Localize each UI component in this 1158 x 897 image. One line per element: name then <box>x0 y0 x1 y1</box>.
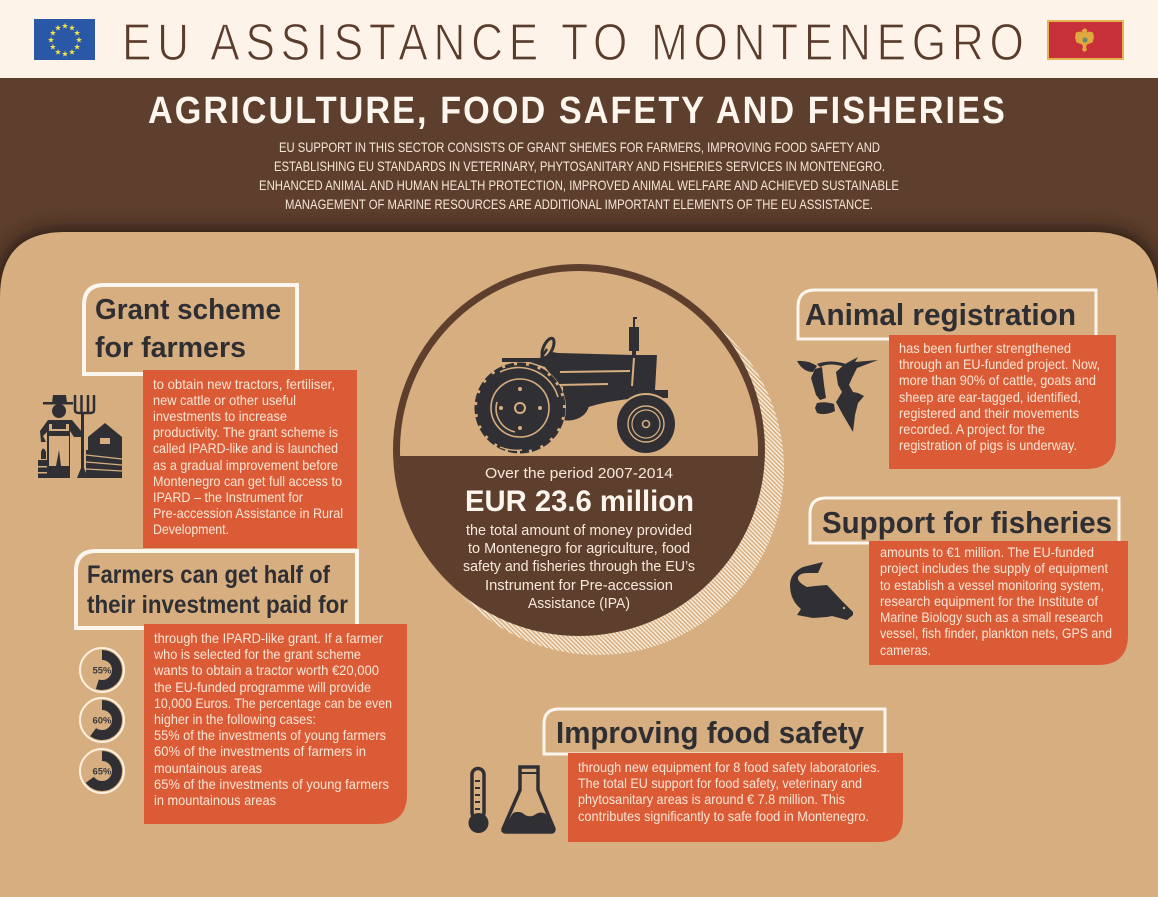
circle body <box>393 264 765 636</box>
centre text: to Montenegro for agriculture, food <box>468 541 690 557</box>
intro text: ENHANCED ANIMAL AND HUMAN HEALTH PROTECTION, IMPROVED ANIMAL WELFARE AND ACHIEVED SUSTAINABLE <box>259 177 899 193</box>
intro text: MANAGEMENT OF MARINE RESOURCES ARE ADDITIONAL IMPORTANT ELEMENTS OF THE EU ASSISTANCE. <box>285 196 873 212</box>
body text: to obtain new tractors, fertiliser, <box>153 376 335 392</box>
icon: farmer with pitchfork and barn <box>38 395 122 478</box>
front wheel <box>615 393 677 455</box>
body text: Montenegro can get full access to <box>153 473 342 489</box>
centre text: safety and fisheries through the EU’s <box>463 559 695 575</box>
chart: 55% donut: 55% <box>92 666 112 676</box>
icon: cow head <box>797 357 878 432</box>
panel: grant scheme for farmers <box>38 285 357 548</box>
body text: 65% of the investments of young farmers <box>154 776 389 792</box>
chart: 65% donut <box>80 749 124 793</box>
heading: Animal registration <box>805 297 1076 332</box>
chart: 65% donut: 65% <box>92 766 112 778</box>
body text: new cattle or other useful <box>153 392 296 408</box>
body text: called IPARD-like and is launched <box>153 440 338 456</box>
panel shadow <box>0 227 1158 897</box>
centre text: Assistance (IPA) <box>528 596 630 612</box>
body text: project includes the supply of equipment <box>880 560 1108 576</box>
icon: Montenegro flag <box>1048 21 1123 59</box>
body text <box>153 630 392 808</box>
hatched circle shadow <box>412 283 784 655</box>
heading box <box>810 498 1119 543</box>
body text: recorded. A project for the <box>899 421 1045 437</box>
heading <box>87 561 348 619</box>
intro text: ESTABLISHING EU STANDARDS IN VETERINARY, PHYTOSANITARY AND FISHERIES SERVICES IN MONTENEGRO. <box>274 158 885 174</box>
header band <box>0 0 1158 78</box>
intro text <box>259 139 899 212</box>
body text: through new equipment for 8 food safety laboratories. <box>578 759 880 775</box>
heading: Farmers can get half of <box>87 561 331 589</box>
orange text box <box>869 541 1128 665</box>
body text <box>899 340 1100 453</box>
centre text: the total amount of money provided <box>466 523 692 539</box>
orange text box <box>144 624 407 824</box>
heading: Support for fisheries <box>822 505 1112 540</box>
orange text box <box>568 753 903 842</box>
heading: their investment paid for <box>87 591 348 619</box>
body text: as a gradual improvement before <box>153 457 338 473</box>
heading box <box>84 285 297 374</box>
heading box <box>798 290 1096 339</box>
heading box <box>76 551 357 628</box>
centre text <box>463 465 695 612</box>
intro text: EU SUPPORT IN THIS SECTOR CONSISTS OF GRANT SHEMES FOR FARMERS, IMPROVING FOOD SAFETY AND <box>279 139 880 155</box>
body text: higher in the following cases: <box>154 711 316 727</box>
body text: contributes significantly to safe food in Montenegro. <box>578 808 869 824</box>
body text: vessel, fish finder, plankton nets, GPS and <box>880 625 1112 641</box>
body text: has been further strengthened <box>899 340 1071 356</box>
body text: mountainous areas <box>154 760 262 776</box>
body text: the EU-funded programme will provide <box>154 679 371 695</box>
body text: 55% of the investments of young farmers <box>154 727 386 743</box>
centre text: Instrument for Pre-accession <box>485 578 673 594</box>
orange text box <box>143 370 357 548</box>
body text: IPARD – the Instrument for <box>153 489 303 505</box>
body text: registered and their movements <box>899 405 1079 421</box>
icon: tractor <box>474 318 677 455</box>
centre text: Over the period 2007-2014 <box>485 465 673 482</box>
title: EU ASSISTANCE TO MONTENEGRO <box>122 14 1024 72</box>
body text: investments to increase <box>153 408 287 424</box>
body text: to establish a vessel monitoring system, <box>880 577 1104 593</box>
body text: more than 90% of cattle, goats and <box>899 372 1096 388</box>
panel: improving food safety <box>468 709 903 842</box>
body text: phytosanitary areas is around € 7.8 million. This <box>578 791 845 807</box>
body text: 10,000 Euros. The percentage can be even <box>154 695 392 711</box>
icon: EU flag <box>34 19 95 60</box>
body text: sheep are ear-tagged, identified, <box>899 389 1081 405</box>
chart: 55% donut <box>80 648 124 692</box>
panel: animal registration <box>797 290 1116 469</box>
panel: farmers can get half <box>76 551 407 824</box>
orange text box <box>889 335 1116 469</box>
centre text: EUR 23.6 million <box>465 485 694 518</box>
body text: 60% of the investments of farmers in <box>154 743 366 759</box>
panel: central circle <box>393 264 784 655</box>
body text: cameras. <box>880 642 931 658</box>
body text: research equipment for the Institute of <box>880 593 1098 609</box>
body text: productivity. The grant scheme is <box>153 424 338 440</box>
body text: through an EU-funded project. Now, <box>899 356 1100 372</box>
body text <box>880 544 1112 658</box>
heading box <box>544 709 885 754</box>
heading <box>95 294 281 364</box>
body text: The total EU support for food safety, veterinary and <box>578 775 862 791</box>
body text <box>153 376 343 537</box>
panel: main tan background <box>0 232 1158 897</box>
chart: 60% donut: 60% <box>92 716 112 726</box>
body text: Pre-accession Assistance in Rural <box>153 505 343 521</box>
body text: who is selected for the grant scheme <box>153 646 361 662</box>
heading: for farmers <box>95 332 246 364</box>
heading: Grant scheme <box>95 294 281 326</box>
panel: support for fisheries <box>790 498 1128 665</box>
body text: Marine Biology such as a small research <box>880 609 1103 625</box>
section heading: AGRICULTURE, FOOD SAFETY AND FISHERIES <box>148 88 1005 131</box>
icon: fish <box>790 562 853 620</box>
body text: in mountainous areas <box>154 792 276 808</box>
heading: Improving food safety <box>556 715 865 750</box>
body text: wants to obtain a tractor worth €20,000 <box>153 662 379 678</box>
body text: registration of pigs is underway. <box>899 437 1077 453</box>
icon: thermometer <box>468 768 488 833</box>
rear wheel <box>474 362 566 454</box>
icon: flask <box>501 767 555 832</box>
body text: amounts to €1 million. The EU-funded <box>880 544 1094 560</box>
chart: 60% donut <box>80 698 124 742</box>
body text <box>578 759 880 824</box>
body text: through the IPARD-like grant. If a farmer <box>154 630 383 646</box>
body text: Development. <box>153 521 229 537</box>
